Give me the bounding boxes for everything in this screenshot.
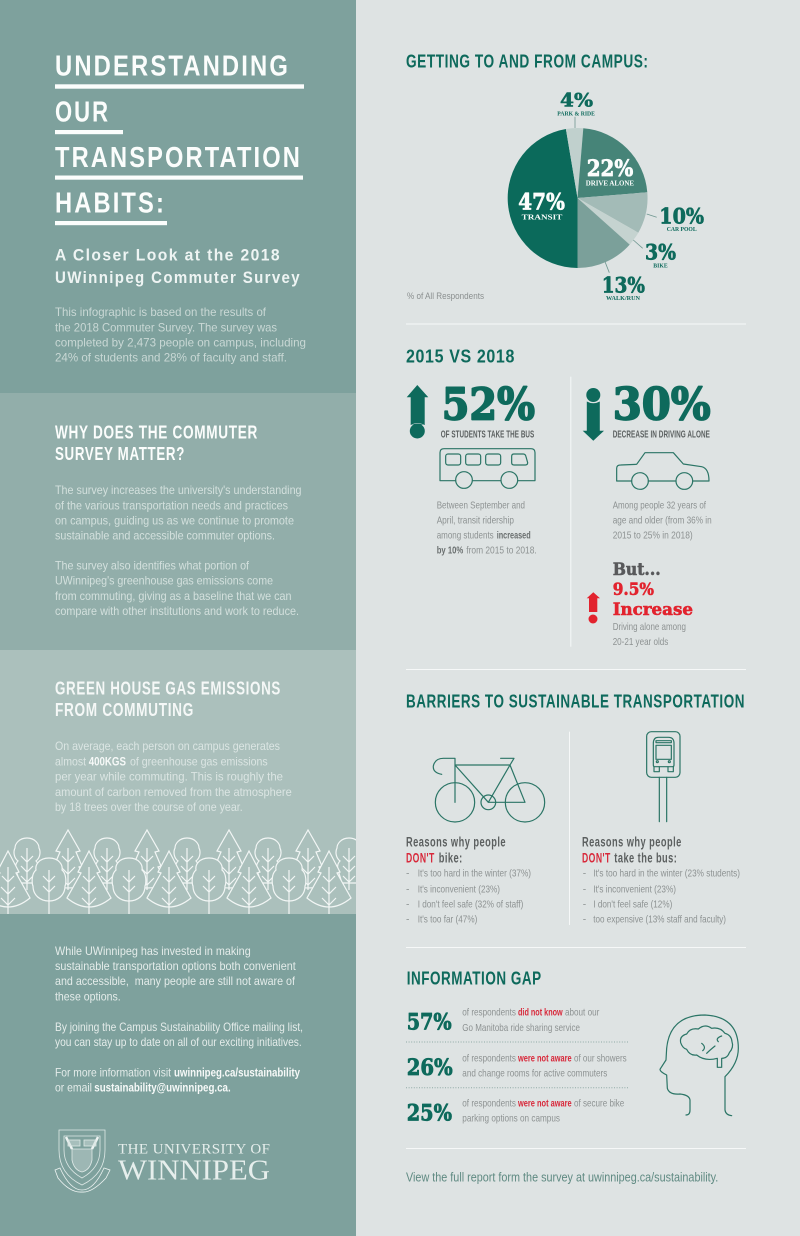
stat: 57%: did not know bbox=[518, 1008, 563, 1019]
list: reasons not to take the bus: It's too hard in the winter (23% students) bbox=[593, 869, 740, 880]
panel: information gap bbox=[406, 967, 738, 1127]
stat: 57%: Go Manitoba ride sharing service bbox=[462, 1023, 580, 1034]
callout: 9.5% increase: But... bbox=[613, 560, 661, 580]
text: older drivers: 2015 to 25% in 2018) bbox=[613, 530, 693, 541]
list: reasons not to take the bus: I don't feel safe (12%) bbox=[593, 899, 672, 910]
stat: 30% decrease in driving alone bbox=[583, 379, 711, 441]
caption: OF STUDENTS TAKE THE BUS bbox=[441, 428, 534, 440]
text: older drivers: age and older (from 36% in bbox=[613, 515, 712, 526]
list: reasons not to take the bus: - bbox=[583, 915, 586, 926]
body text bbox=[55, 739, 292, 814]
right background bbox=[356, 0, 800, 1236]
text: ridership: Between September and bbox=[437, 500, 525, 511]
list: reasons not to take the bus: - bbox=[583, 899, 586, 910]
heading: GETTING TO AND FROM CAMPUS: bbox=[406, 50, 648, 71]
list: reasons not to take the bus bbox=[582, 835, 740, 926]
list: reasons not to bike: - bbox=[406, 869, 409, 880]
body text: For more information visit bbox=[55, 1066, 172, 1080]
panel: 2015 vs 2018 bbox=[406, 345, 712, 648]
body text: sustainable and accessible commuter options. bbox=[55, 528, 275, 542]
title: OUR bbox=[55, 96, 110, 128]
label: 4% park and ride: PARK & RIDE bbox=[557, 111, 595, 117]
body text: amount of carbon removed from the atmosphere bbox=[55, 785, 292, 799]
icon: down arrow bbox=[583, 388, 604, 441]
title: TRANSPORTATION bbox=[55, 142, 302, 174]
list: reasons not to take the bus: take the bus: bbox=[614, 850, 677, 865]
callout: 9.5% increase: 9.5% bbox=[613, 580, 654, 600]
heading: SURVEY MATTER? bbox=[55, 443, 185, 464]
stat: 25%: of respondents bbox=[462, 1099, 516, 1110]
list: reasons not to take the bus: It's inconvenient (23%) bbox=[593, 884, 676, 895]
label: 3% bike: 3% bbox=[645, 239, 676, 264]
panel: barriers to sustainable transportation bbox=[406, 690, 745, 926]
stat: 57% bbox=[407, 1008, 600, 1035]
body text: from commuting, giving as a baseline that we can bbox=[55, 589, 292, 603]
intro text: the 2018 Commuter Survey. The survey was bbox=[55, 320, 277, 334]
text: ridership: by 10% bbox=[437, 545, 463, 556]
body text: of the various transportation needs and practices bbox=[55, 498, 288, 512]
subtitle bbox=[55, 246, 301, 287]
list: reasons not to take the bus: Reasons why people bbox=[582, 835, 682, 850]
stat: 25% bbox=[407, 1099, 625, 1127]
heading: 2015 VS 2018 bbox=[406, 345, 515, 366]
body text: you can stay up to date on all of our exciting initiatives. bbox=[55, 1035, 302, 1049]
body text bbox=[55, 483, 302, 618]
icon: up arrow bbox=[407, 385, 428, 438]
list: reasons not to take the bus: - bbox=[583, 884, 586, 895]
big number: 52% bbox=[442, 379, 535, 430]
list: reasons not to bike: DON'T bbox=[406, 850, 435, 865]
heading: INFORMATION GAP bbox=[407, 967, 542, 988]
label: 10% car pool: 10% bbox=[659, 203, 704, 228]
list: reasons not to take the bus: DON'T bbox=[582, 850, 611, 865]
panel: greenhouse gas emissions bbox=[0, 650, 362, 914]
label: 13% walk/run: WALK/RUN bbox=[606, 296, 641, 302]
list: reasons not to take the bus: - bbox=[583, 869, 586, 880]
panel: why the survey matters bbox=[0, 393, 356, 650]
stat: 26%: were not aware bbox=[517, 1053, 572, 1064]
text: ridership: among students bbox=[437, 530, 494, 541]
body text: or email bbox=[55, 1081, 92, 1095]
chart note: % of All Respondents bbox=[407, 291, 484, 302]
icon: bus stop sign bbox=[647, 732, 680, 822]
callout: 9.5% increase bbox=[587, 560, 693, 648]
label: 10% car pool: CAR POOL bbox=[667, 227, 697, 233]
label: 4% park and ride: 4% bbox=[560, 90, 593, 112]
heading bbox=[55, 421, 258, 464]
stat: 57%: of respondents bbox=[462, 1008, 516, 1019]
list: reasons not to bike: It's inconvenient (23%) bbox=[418, 884, 500, 895]
body text: uwinnipeg.ca/sustainability bbox=[174, 1066, 300, 1080]
stat: 57%: about our bbox=[565, 1008, 600, 1019]
callout: 9.5% increase: Increase bbox=[613, 600, 693, 620]
stat: 25%: parking options on campus bbox=[462, 1114, 560, 1125]
text: older drivers bbox=[613, 500, 712, 541]
text: ridership: increased bbox=[497, 530, 531, 541]
body text bbox=[55, 944, 303, 1095]
stat: 57%: 57% bbox=[407, 1009, 452, 1035]
label: 22% drive alone: 22% bbox=[587, 156, 633, 182]
body text: UWinnipeg's greenhouse gas emissions come bbox=[55, 574, 273, 588]
text: ridership bbox=[437, 500, 537, 556]
stat: 25%: were not aware bbox=[517, 1099, 572, 1110]
callout: 9.5% increase: Driving alone among bbox=[613, 622, 686, 633]
list: reasons not to take the bus: too expensive (13% staff and faculty) bbox=[593, 915, 726, 926]
panel: call to action bbox=[0, 914, 356, 1236]
label: 3% bike: BIKE bbox=[653, 263, 668, 269]
body text: almost bbox=[55, 754, 87, 768]
body text: 400KGS bbox=[89, 754, 126, 768]
stat: 25%: of secure bike bbox=[574, 1099, 625, 1110]
list: reasons not to bike: Reasons why people bbox=[406, 835, 506, 850]
label: 47% transit: TRANSIT bbox=[522, 212, 562, 221]
icon: red up arrow bbox=[587, 592, 600, 624]
illustration: tree row bbox=[0, 830, 362, 914]
logo: university crest bbox=[55, 1130, 110, 1192]
list: reasons not to bike bbox=[406, 835, 531, 926]
label: 10% car pool bbox=[647, 203, 704, 233]
pie chart bbox=[508, 128, 648, 268]
body text: compare with other institutions and work to reduce. bbox=[55, 604, 299, 618]
stat: 26%: and change rooms for active commuters bbox=[462, 1069, 607, 1080]
body text: On average, each person on campus generates bbox=[55, 739, 280, 753]
text: ridership: April, transit ridership bbox=[437, 515, 514, 526]
intro text: completed by 2,473 people on campus, including bbox=[55, 336, 306, 350]
icon: car bbox=[617, 453, 709, 489]
stat: 25%: 25% bbox=[407, 1101, 452, 1127]
stat: 26%: of our showers bbox=[574, 1053, 627, 1064]
body text: The survey increases the university's understanding bbox=[55, 483, 302, 497]
intro text: This infographic is based on the results of bbox=[55, 305, 267, 319]
body text: per year while commuting. This is roughly the bbox=[55, 770, 283, 784]
logo: university wordmark bbox=[118, 1141, 270, 1186]
label: 4% park and ride bbox=[557, 90, 595, 128]
list: reasons not to bike: - bbox=[406, 899, 409, 910]
heading: WHY DOES THE COMMUTER bbox=[55, 421, 258, 442]
stat: 26% bbox=[407, 1053, 627, 1081]
logo: university wordmark: WINNIPEG bbox=[118, 1155, 270, 1186]
icon: bus bbox=[440, 449, 535, 488]
icon: head with brain bbox=[660, 1015, 738, 1116]
title bbox=[55, 50, 304, 225]
stat: 52% take the bus bbox=[407, 379, 535, 440]
body text: While UWinnipeg has invested in making bbox=[55, 944, 251, 958]
list: reasons not to bike: I don't feel safe (32% of staff) bbox=[418, 899, 523, 910]
body text: these options. bbox=[55, 990, 121, 1004]
panel: getting to and from campus bbox=[406, 50, 704, 302]
label: 13% walk/run bbox=[602, 262, 645, 302]
body text: by 18 trees over the course of one year. bbox=[55, 800, 243, 814]
heading bbox=[55, 677, 281, 720]
text: ridership: from 2015 to 2018. bbox=[466, 545, 537, 556]
big number: 30% bbox=[613, 379, 711, 430]
footer link text: View the full report form the survey at uwinnipeg.ca/sustainability. bbox=[406, 1171, 718, 1185]
label: 13% walk/run: 13% bbox=[602, 273, 645, 298]
callout: 9.5% increase: 20-21 year olds bbox=[613, 637, 668, 648]
list: reasons not to bike: It's too hard in the winter (37%) bbox=[418, 869, 531, 880]
list: reasons not to bike: It's too far (47%) bbox=[418, 915, 477, 926]
label: 22% drive alone: DRIVE ALONE bbox=[586, 180, 634, 188]
logo: university wordmark: THE UNIVERSITY OF bbox=[118, 1141, 270, 1157]
list: reasons not to bike: - bbox=[406, 915, 409, 926]
subtitle: A Closer Look at the 2018 bbox=[55, 246, 281, 265]
body text: The survey also identifies what portion of bbox=[55, 558, 250, 572]
body text: sustainable transportation options both convenient bbox=[55, 959, 296, 973]
text: older drivers: Among people 32 years of bbox=[613, 500, 706, 511]
subtitle: UWinnipeg Commuter Survey bbox=[55, 268, 301, 287]
body text: of greenhouse gas emissions bbox=[130, 754, 268, 768]
panel: title and intro bbox=[0, 0, 356, 393]
icon: bicycle bbox=[433, 758, 545, 822]
stat: 26%: of respondents bbox=[462, 1053, 516, 1064]
body text: and accessible, many people are still not aware of bbox=[55, 974, 296, 988]
label: 47% transit: 47% bbox=[518, 189, 565, 215]
intro text: 24% of students and 28% of faculty and staff. bbox=[55, 351, 287, 365]
caption: DECREASE IN DRIVING ALONE bbox=[613, 428, 710, 440]
body text: By joining the Campus Sustainability Office mailing list, bbox=[55, 1020, 303, 1034]
label: 3% bike bbox=[633, 239, 676, 269]
stat: 26%: 26% bbox=[407, 1055, 453, 1081]
list: reasons not to bike: - bbox=[406, 884, 409, 895]
body text: on campus, guiding us as we continue to promote bbox=[55, 513, 294, 527]
title: HABITS: bbox=[55, 188, 166, 220]
heading: GREEN HOUSE GAS EMISSIONS bbox=[55, 677, 281, 698]
heading: FROM COMMUTING bbox=[55, 699, 194, 720]
body text: sustainability@uwinnipeg.ca. bbox=[94, 1081, 231, 1095]
intro text bbox=[55, 305, 306, 365]
list: reasons not to bike: bike: bbox=[439, 850, 463, 865]
title: UNDERSTANDING bbox=[55, 50, 290, 82]
